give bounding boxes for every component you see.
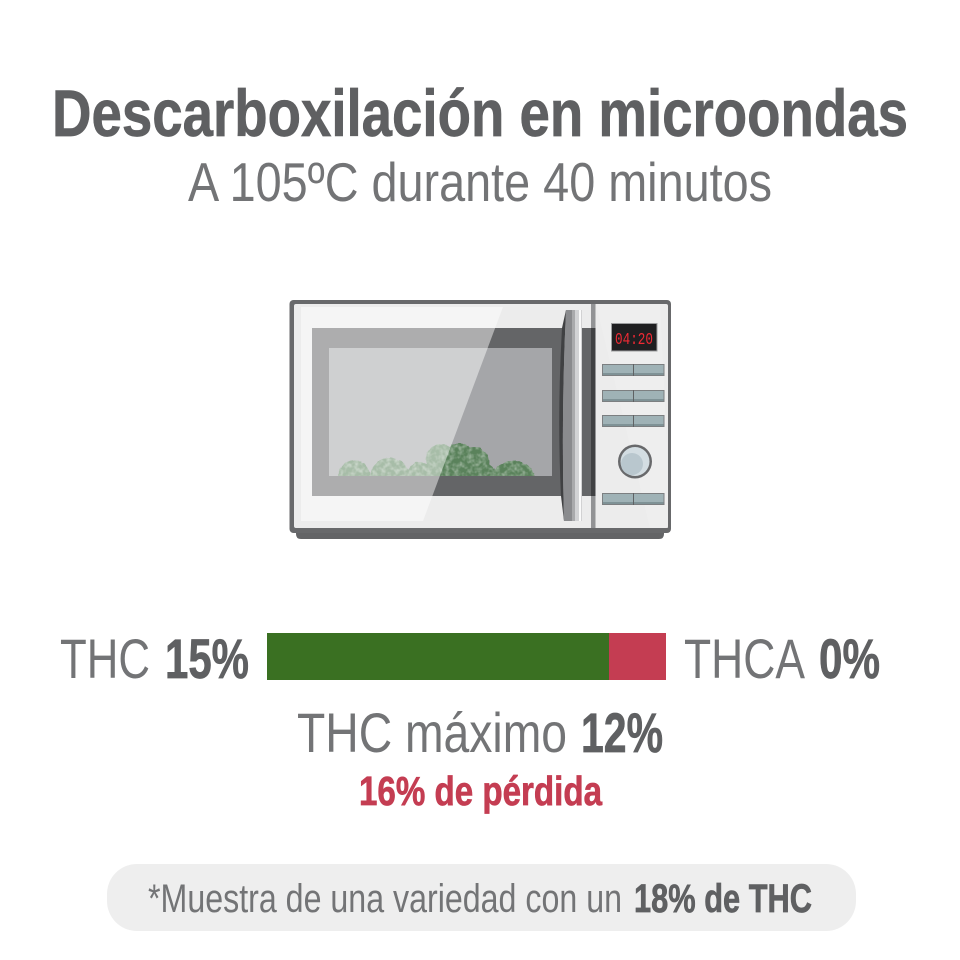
digital display (612, 324, 657, 351)
callout: loss: 16% de pérdida (359, 768, 603, 814)
handle shadow (559, 310, 568, 521)
button row 2 (602, 390, 664, 402)
door divider (591, 304, 596, 528)
footnote text: 18% de THC (634, 877, 812, 921)
glass glare (301, 307, 503, 521)
window frame (312, 328, 592, 496)
label: THC máximo 12%: THC máximo (297, 701, 567, 764)
door handle (563, 310, 582, 521)
window interior (329, 348, 552, 476)
pill background (107, 864, 856, 931)
microwave base (296, 530, 664, 539)
label: THCA 0%: 0% (819, 627, 880, 690)
THC segment (267, 633, 609, 680)
control panel sheen (596, 304, 668, 528)
subtitle: A 105ºC durante 40 minutos (188, 151, 772, 213)
button row 4 (602, 493, 664, 505)
footnote text: *Muestra de una variedad con un (148, 877, 622, 921)
footnote pill (107, 864, 856, 931)
label: THC 15% (60, 627, 249, 690)
label: THCA 0%: THCA (684, 627, 806, 690)
microwave body (294, 304, 668, 528)
control knob (618, 444, 652, 478)
label: THC 15%: 15% (165, 627, 249, 690)
microwave outer casing (290, 300, 671, 533)
label: THC 15%: THC (60, 627, 150, 690)
progress bar (267, 633, 666, 680)
digital display: 04:20 (615, 331, 653, 350)
button row 3 (602, 415, 664, 427)
button row 1 (602, 364, 664, 376)
label: THC máximo 12%: 12% (581, 701, 663, 764)
cannabis buds (338, 443, 535, 476)
loss segment (609, 633, 666, 680)
icon: microwave (290, 300, 671, 539)
